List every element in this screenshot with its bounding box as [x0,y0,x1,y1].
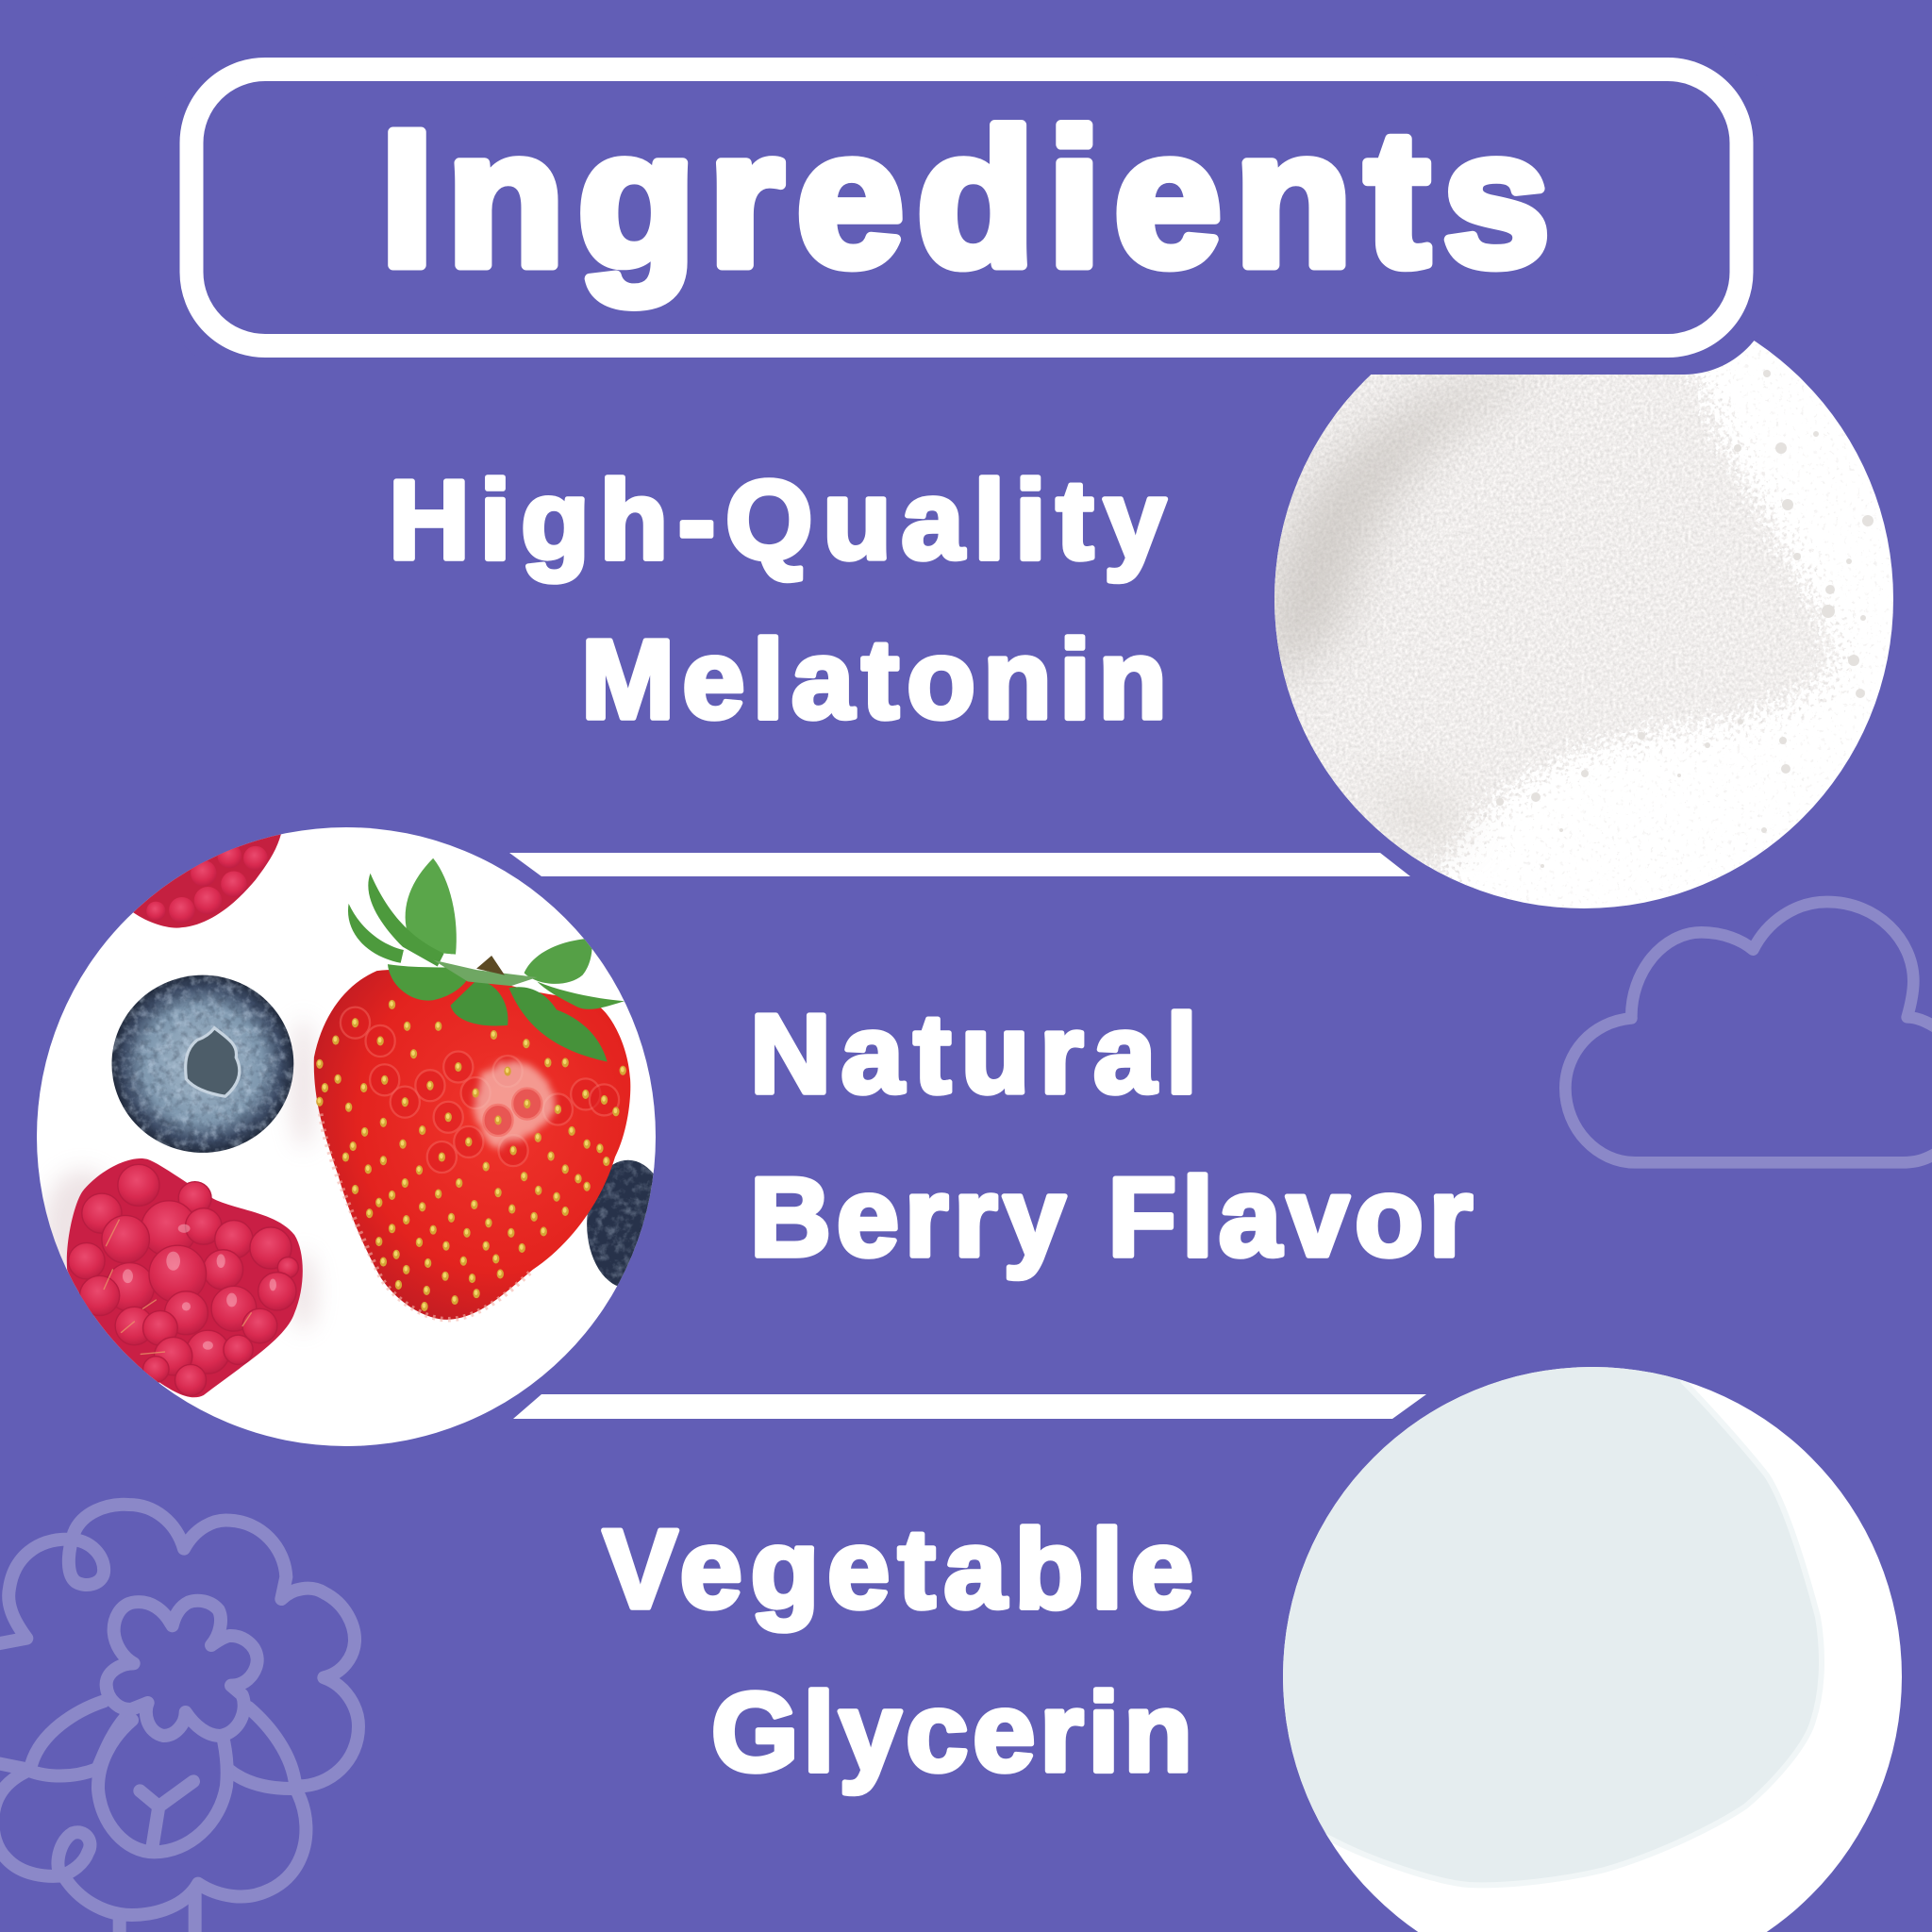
highlight [475,1061,555,1148]
raspberry hairs and highlights [104,1220,251,1354]
seeds [316,1000,626,1311]
strawberry leaves [348,858,625,1061]
dimples [341,1008,619,1173]
text: Vegetable Glycerin [603,1507,1193,1795]
panel: title cutout [160,38,1774,375]
text: Vegetable Glycerin: Vegetable [603,1507,1193,1632]
icon: sheep outline [0,1505,358,1932]
title box [192,70,1741,345]
blueberry left [108,973,299,1155]
glycerin drop [1283,1367,1824,1889]
text: High-Quality Melatonin: High-Quality [389,458,1166,583]
blueberry right [587,1160,653,1287]
raspberry main [67,1158,303,1397]
divider bottom [513,1394,1426,1419]
raspberry top [133,834,281,928]
text: Natural Berry Flavor [750,991,1473,1280]
berries [43,819,672,1397]
white circle [1283,1367,1902,1932]
strawberry [314,858,630,1320]
divider top [509,853,1410,876]
heading: Ingredients [380,91,1550,307]
powder mound [1274,343,1893,908]
text: Natural Berry Flavor: Natural [750,991,1197,1117]
icon: cloud outline [1565,902,1932,1162]
blueberry crown [186,1028,240,1096]
white circle [37,827,656,1446]
panel: melatonin powder photo [1274,341,1893,908]
edge speckle [321,1114,533,1320]
white circle [1274,290,1893,908]
text: High-Quality Melatonin [389,458,1167,742]
soft shadows [43,1019,316,1330]
text: Natural Berry Flavor: Berry Flavor [750,1155,1473,1280]
text: High-Quality Melatonin: Melatonin [581,617,1167,742]
text: Vegetable Glycerin: Glycerin [711,1670,1192,1795]
panel: berries photo [37,819,672,1446]
panel: glycerin photo [1283,1367,1902,1932]
title frame [192,70,1741,345]
